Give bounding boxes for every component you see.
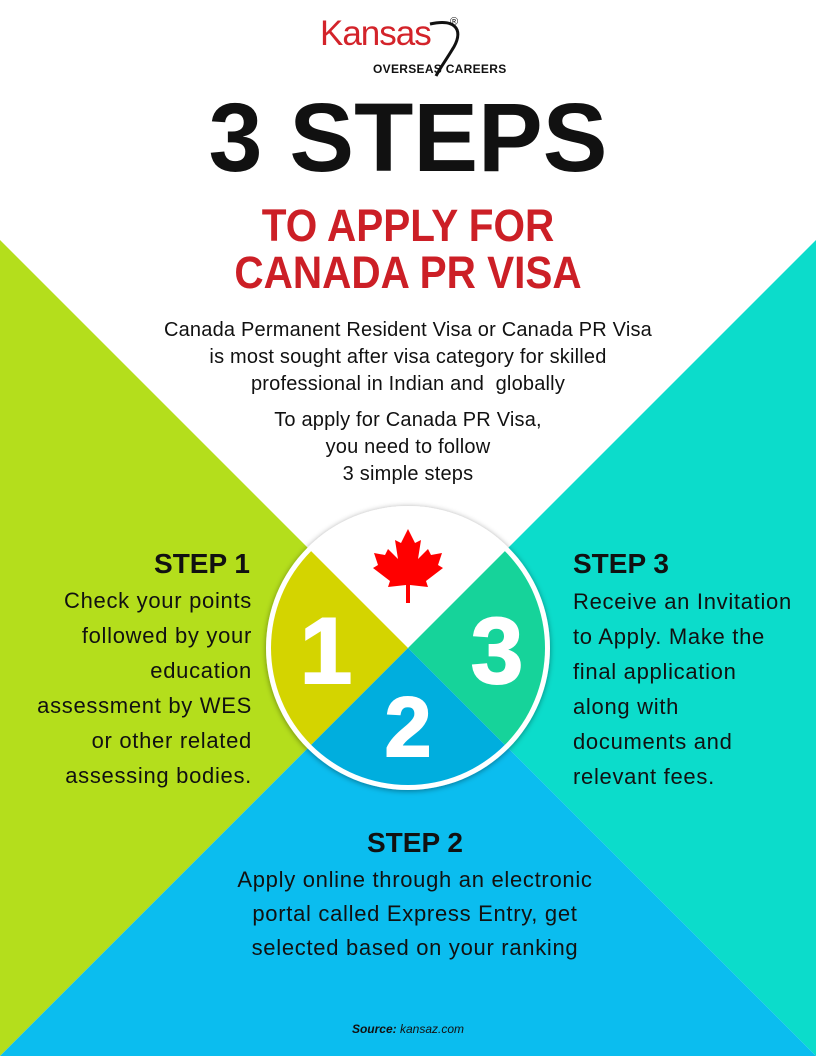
logo [320,14,506,77]
circle: 2 [385,680,431,774]
circle: 3 [471,598,523,703]
step 3: to Apply. Make the [573,624,765,649]
step 1 [37,548,252,788]
subtitle: CANADA PR VISA [234,247,582,298]
circle: 1 [300,598,352,703]
step 2: Apply online through an electronic [237,867,593,892]
step 3: Receive an Invitation [573,589,792,614]
step 2: STEP 2 [367,827,463,858]
step 3: along with [573,694,679,719]
step 2: selected based on your ranking [252,935,578,960]
logo: ® [450,16,458,28]
intro text: Canada Permanent Resident Visa or Canada PR Visa [164,319,652,341]
icon: maple leaf [373,529,443,603]
subtitle [234,200,582,298]
step 1: STEP 1 [154,548,250,579]
title: 3 STEPS [209,83,607,192]
step 3: STEP 3 [573,548,669,579]
step 1: followed by your [82,623,252,648]
step 1: education [150,658,252,683]
intro text: is most sought after visa category for skilled [209,346,607,368]
step 2: portal called Express Entry, get [252,901,578,926]
step 1: Check your points [64,588,252,613]
step 3 [573,548,792,789]
step 1: assessment by WES [37,693,252,718]
subtitle: TO APPLY FOR [262,200,554,251]
step 1: assessing bodies. [65,763,252,788]
circle [262,503,554,794]
step 3: relevant fees. [573,764,715,789]
intro text [164,319,652,395]
intro text 2: 3 simple steps [343,463,473,485]
step 3: documents and [573,729,733,754]
intro text 2 [274,409,542,485]
step 1: or other related [92,728,252,753]
source: Source: kansaz.com [352,1022,464,1036]
intro text 2: To apply for Canada PR Visa, [274,409,542,431]
step 3: final application [573,659,737,684]
step 2 [237,827,593,960]
logo: Kansas [320,14,431,53]
intro text: professional in Indian and globally [251,373,565,395]
logo: OVERSEAS CAREERS [373,62,506,76]
intro text 2: you need to follow [326,436,490,458]
